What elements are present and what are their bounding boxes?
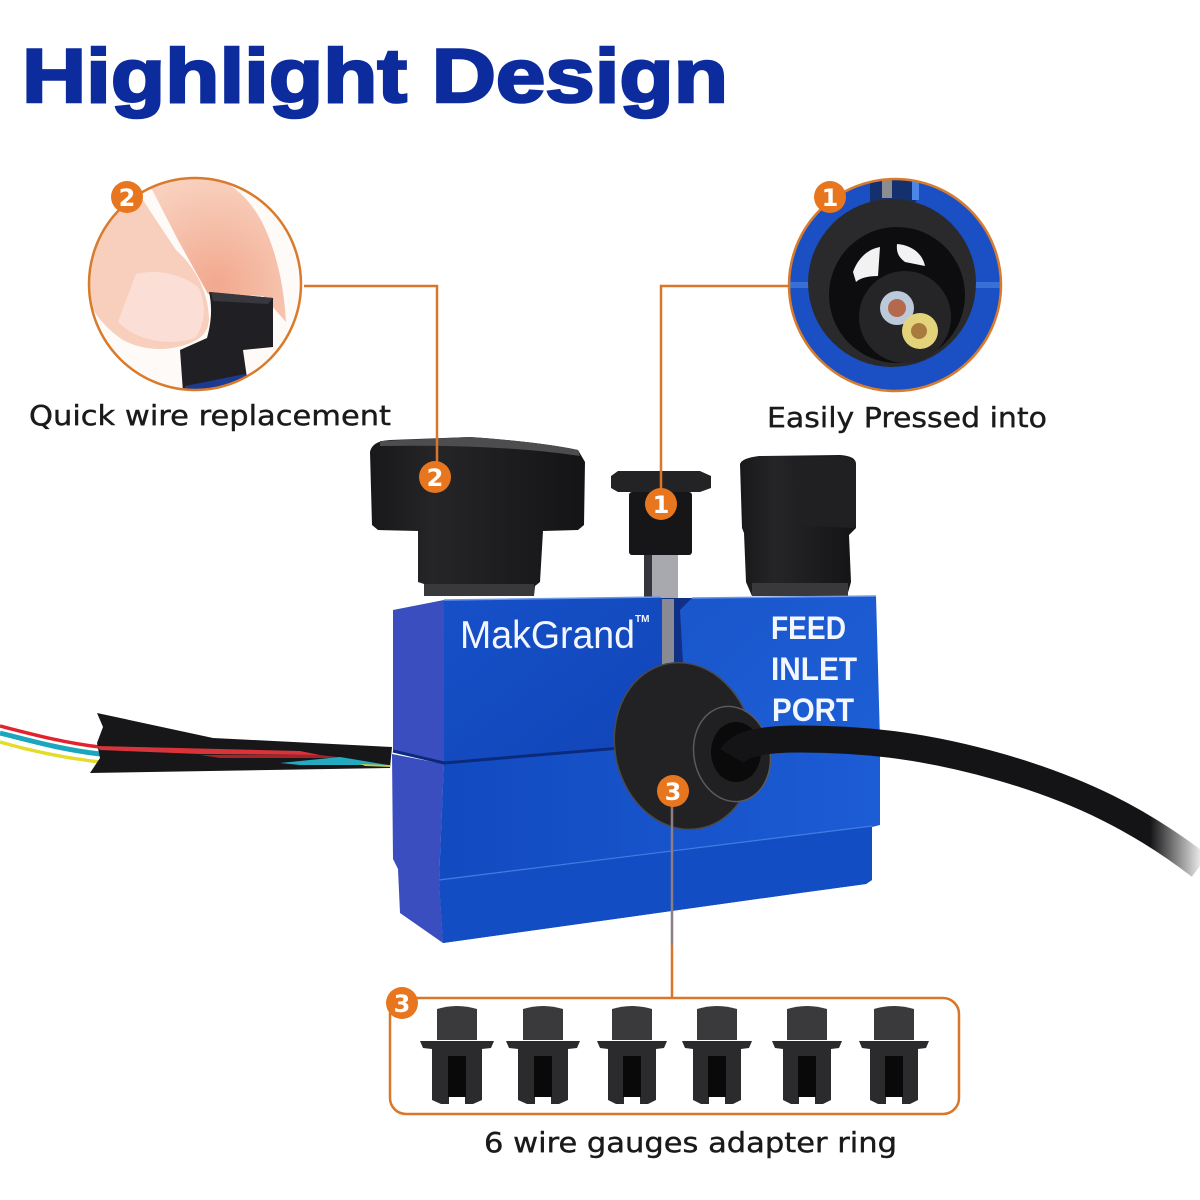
callout 2 ring: [89, 178, 301, 390]
trademark mark: TM: [635, 614, 649, 625]
top half side face: [393, 600, 444, 762]
brand text on block: MakGrand: [460, 614, 635, 657]
badge 2 on knob: [419, 461, 451, 493]
adapter ring 3: [597, 1006, 667, 1104]
base fill behind the seam: [444, 740, 640, 790]
title: Highlight Design: [22, 34, 728, 119]
callout 1: easily pressed into photo: [788, 176, 1002, 392]
feed inlet port text: FEED: [771, 610, 846, 646]
adapter rings row: [420, 1006, 929, 1104]
top half front face: [444, 597, 666, 762]
groove between halves: [660, 598, 692, 678]
callout 2: quick wire replacement photo: [90, 179, 286, 389]
badge 3 on box: 3: [394, 990, 410, 1018]
badge 2 on photo: 2: [119, 184, 135, 212]
blue block: [392, 596, 880, 943]
badge 1 on photo: [814, 181, 846, 213]
right knob: [740, 455, 856, 596]
feed inlet port text: PORT: [772, 692, 854, 728]
lower half side face: [392, 754, 444, 943]
lower half front face: [439, 730, 880, 943]
badge 1 on plunger: 1: [653, 491, 669, 519]
adapter ring 1: [420, 1006, 494, 1104]
adapter ring 5: [772, 1006, 842, 1104]
label: easily pressed into: Easily Pressed into: [767, 401, 1047, 434]
badge 3 on flange: [657, 775, 689, 807]
left wire bundle: [0, 713, 392, 773]
badge 2 on photo: [111, 181, 143, 213]
badge 1 on plunger: [645, 488, 677, 520]
callout 1 ring: [789, 179, 1001, 391]
black cable: [732, 739, 1200, 866]
lower strip: [439, 826, 872, 943]
adapter ring 6: [859, 1006, 929, 1104]
badge 2 on knob: 2: [427, 464, 443, 492]
left knob: [370, 437, 585, 596]
adapter flange and port: [599, 649, 779, 843]
badge 1 on photo: 1: [822, 184, 838, 212]
badge 3 on flange: 3: [665, 778, 681, 806]
badge 3 on box: [386, 987, 418, 1019]
adapter rings box: [390, 998, 959, 1114]
label: quick wire replacement: Quick wire replacement: [29, 399, 391, 432]
center plunger: [611, 471, 711, 599]
label: adapter ring: 6 wire gauges adapter ring: [484, 1126, 897, 1159]
feed inlet port text: [771, 610, 857, 728]
right half face: [680, 596, 880, 770]
adapter ring 4: [682, 1006, 752, 1104]
adapter ring 2: [506, 1006, 580, 1104]
callout connector lines: [304, 286, 790, 998]
feed inlet port text: INLET: [771, 651, 857, 687]
